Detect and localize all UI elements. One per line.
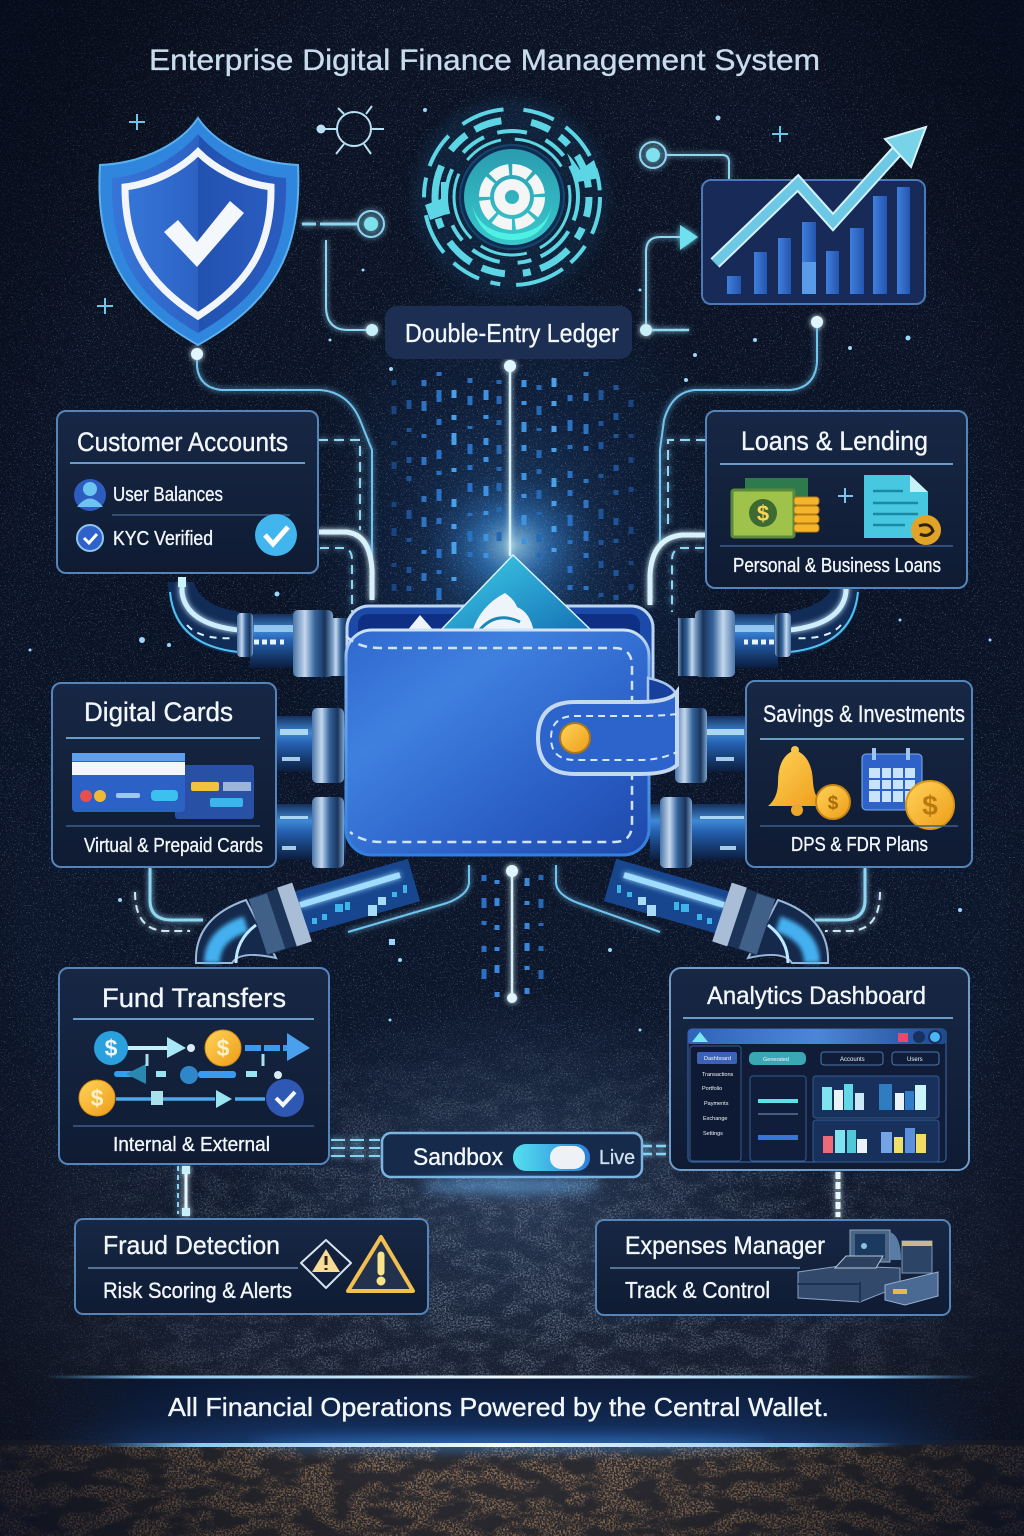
panel: fund transfers xyxy=(59,968,329,1164)
icon: security shield xyxy=(99,118,298,345)
panel: savings and investments: DPS & FDR Plans xyxy=(791,834,928,856)
icon: user xyxy=(74,479,106,511)
icon: toggle switch xyxy=(513,1144,590,1171)
pipe: upper right xyxy=(678,577,860,677)
dashboard window: Accounts xyxy=(840,1057,865,1063)
icon: accounting machine xyxy=(798,1230,938,1305)
dashboard window: Users xyxy=(907,1057,923,1063)
emblem blocks xyxy=(425,153,600,220)
icon: large check xyxy=(255,514,297,556)
footer glow line xyxy=(100,1437,900,1451)
panel: savings and investments xyxy=(746,681,972,867)
connectors lower xyxy=(178,1140,838,1217)
panel: savings and investments: Savings & Investments xyxy=(763,701,965,728)
footer top line xyxy=(45,1376,980,1378)
panel: digital cards xyxy=(52,683,276,867)
pipe: lower left xyxy=(196,875,414,963)
panel: fund transfers: Internal & External xyxy=(113,1134,270,1156)
dashboard window: Payments xyxy=(704,1101,729,1107)
panel: digital cards: Virtual & Prepaid Cards xyxy=(84,835,263,857)
dashboard window: Generated xyxy=(763,1057,789,1063)
panel: sandbox live toggle xyxy=(382,1133,642,1177)
wallet card xyxy=(406,555,593,632)
wallet body xyxy=(346,630,649,855)
data rain xyxy=(394,372,631,1010)
pipes: middle xyxy=(276,708,746,868)
footer band xyxy=(54,1377,968,1445)
wallet back pocket xyxy=(347,606,653,726)
panel: loans and lending: Loans & Lending xyxy=(741,426,928,456)
panel: expenses manager xyxy=(596,1220,950,1315)
panel: loans and lending: Personal & Business Loans xyxy=(733,555,941,577)
panel: double-entry ledger xyxy=(385,306,632,359)
panel: fraud detection: Fraud Detection xyxy=(103,1230,280,1260)
dashboard window: Portfolio xyxy=(702,1086,722,1092)
panel: fund transfers: Fund Transfers xyxy=(102,983,286,1013)
icon: growth chart xyxy=(702,127,926,304)
icon: plus sparkles xyxy=(97,114,788,314)
pipe: lower right xyxy=(610,875,828,963)
panel: customer accounts: KYC Verified xyxy=(113,528,213,550)
panel: sandbox live toggle: Live xyxy=(599,1147,635,1169)
panel: loans and lending xyxy=(706,411,967,588)
panel: analytics dashboard xyxy=(670,968,969,1170)
sparkle particles xyxy=(28,108,992,1032)
transfer flow diagram xyxy=(79,1030,310,1117)
panel: sandbox live toggle: Sandbox xyxy=(413,1144,503,1171)
central wallet xyxy=(346,555,677,855)
icon: loan document xyxy=(864,475,941,545)
icon: cash stack xyxy=(732,478,819,537)
panel: fraud detection xyxy=(75,1219,428,1314)
dashboard window xyxy=(688,1029,946,1162)
panel: expenses manager: Track & Control xyxy=(625,1277,770,1303)
icon: central ledger emblem xyxy=(413,98,609,294)
panel: fraud detection: Risk Scoring & Alerts xyxy=(103,1278,292,1303)
icon: alert diamond xyxy=(301,1240,351,1288)
panel: customer accounts xyxy=(57,411,318,573)
dashboard window: Exchange xyxy=(703,1116,727,1122)
transfer flow diagram: $ xyxy=(105,1035,118,1061)
dashboard window: Dashboard xyxy=(704,1056,731,1062)
wallet clasp xyxy=(560,723,590,753)
icon: back card xyxy=(175,765,254,819)
panel: analytics dashboard: Analytics Dashboard xyxy=(707,982,926,1010)
panel: double-entry ledger: Double-Entry Ledger xyxy=(405,318,619,348)
icon: calendar xyxy=(862,748,954,829)
dashboard window: Settings xyxy=(703,1131,723,1137)
transfer flow diagram: $ xyxy=(91,1085,104,1111)
dashboard window: Transactions xyxy=(702,1072,734,1078)
panel: customer accounts: User Balances xyxy=(113,484,223,506)
icon: calendar: $ xyxy=(922,790,938,821)
icon: bell: $ xyxy=(828,793,839,814)
pipe: upper left xyxy=(168,577,350,677)
wallet strap xyxy=(538,678,677,774)
footer tagline: All Financial Operations Powered by the Central Wallet. xyxy=(168,1392,829,1422)
panel: expenses manager: Expenses Manager xyxy=(625,1232,825,1260)
icon: warning triangle xyxy=(348,1237,413,1291)
title: Enterprise Digital Finance Management System xyxy=(149,44,820,77)
icon: cash stack: $ xyxy=(757,501,769,526)
icon: bell xyxy=(768,746,850,819)
panel: digital cards: Digital Cards xyxy=(84,697,233,727)
panel: customer accounts: Customer Accounts xyxy=(77,427,288,457)
icon: verified badge xyxy=(77,525,103,551)
icon: check mark xyxy=(164,201,244,267)
icon: small circuit node xyxy=(318,106,384,154)
transfer flow diagram: $ xyxy=(217,1035,230,1061)
connectors top xyxy=(135,142,880,1003)
sandbox glow xyxy=(421,1178,601,1194)
icon: front card xyxy=(72,753,185,812)
